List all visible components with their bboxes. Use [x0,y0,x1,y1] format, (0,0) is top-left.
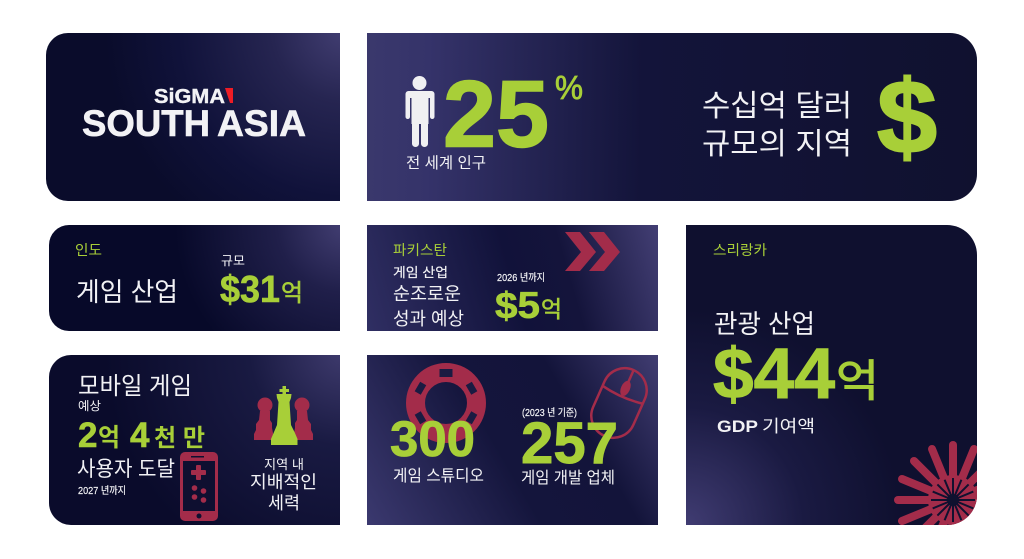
stat: 500 million dollars: 억 [541,296,562,322]
stat: 500 million dollars: $5 [495,285,540,326]
logo: Asia wordmark: ASIA [217,103,306,144]
heading: mobile games: 모바일 게임 [78,373,192,400]
stat: 240 million: 2 [78,416,97,455]
heading: billion-dollar region: 수십억 달러 [702,90,852,123]
heading: billion-dollar region [702,90,852,161]
stat: 3.1 billion dollars: $31 [220,269,280,311]
text: users reached: 사용자 도달 [77,458,175,481]
label: by 2027: 2027 년까지 [78,485,126,497]
label: game developers: 게임 개발 업체 [521,469,615,487]
logo: red flag mark [225,88,233,103]
panel: population and billion-dollar region [367,33,977,201]
panel: Pakistan [367,225,658,331]
label: size: 규모 [221,254,245,268]
panel: India [49,225,340,331]
text: steady performance forecast: 순조로운 [393,284,461,304]
stat: 257: 257 [521,411,618,476]
stat: 240 million: 천 만 [154,425,205,452]
label: game studios: 게임 스튜디오 [393,467,484,485]
icon: chevrons [565,232,620,271]
panel: studios and developers [367,355,658,525]
label: forecast: 예상 [78,399,101,413]
stat: 4.4 billion dollars: 억 [836,357,879,406]
label: Sri Lanka: 스리랑카 [713,242,767,258]
text: steady performance forecast: 게임 산업 [393,265,448,280]
text: regional dominance: 지역 내 [264,457,304,472]
text: steady performance forecast: 성과 예상 [393,309,464,329]
stat: 500 million dollars [495,285,562,326]
icon: computer mouse [584,361,654,445]
label: as of 2023: (2023 년 기준) [522,407,577,419]
icon: dollar sign: $ [877,60,937,176]
text: regional dominance: 지배적인 [250,472,317,492]
label: GDP contribution [717,417,815,436]
text: regional dominance [250,457,317,513]
logo: South wordmark: SOUTH [82,103,210,144]
stat: 240 million: 억 [98,424,120,452]
heading: tourism industry: 관광 산업 [714,309,815,339]
label: GDP contribution: GDP [717,417,758,436]
icon: phone [180,452,218,521]
label: Pakistan: 파키스탄 [393,242,447,258]
label: by 2026: 2026 년까지 [497,272,545,284]
stat: 4.4 billion dollars: $44 [713,335,836,414]
label: GDP contribution: 기여액 [762,417,815,436]
stat: 300: 300 [390,411,475,467]
stat: 3.1 billion dollars: 억 [281,280,303,307]
label: world population: 전 세계 인구 [406,154,486,172]
panel: Sri Lanka [686,225,977,525]
stat: percent sign: % [555,69,583,106]
text: regional dominance: 세력 [268,493,300,513]
stat: 240 million: 4 [130,416,150,455]
text: steady performance forecast [393,265,464,329]
icon: person [406,76,434,147]
stat: 25: 25 [443,62,549,168]
heading: billion-dollar region: 규모의 지역 [702,128,852,161]
icon: sunburst [894,441,977,525]
logo: SiGMA wordmark: SiGMA [154,86,225,108]
panel: logo [46,33,340,201]
label: India: 인도 [75,242,102,258]
heading: game industry: 게임 산업 [76,277,178,307]
panel: mobile gaming [49,355,340,525]
stat: 240 million [78,416,205,455]
icon: chess pieces [254,386,313,445]
icon: casino chip [415,369,477,434]
